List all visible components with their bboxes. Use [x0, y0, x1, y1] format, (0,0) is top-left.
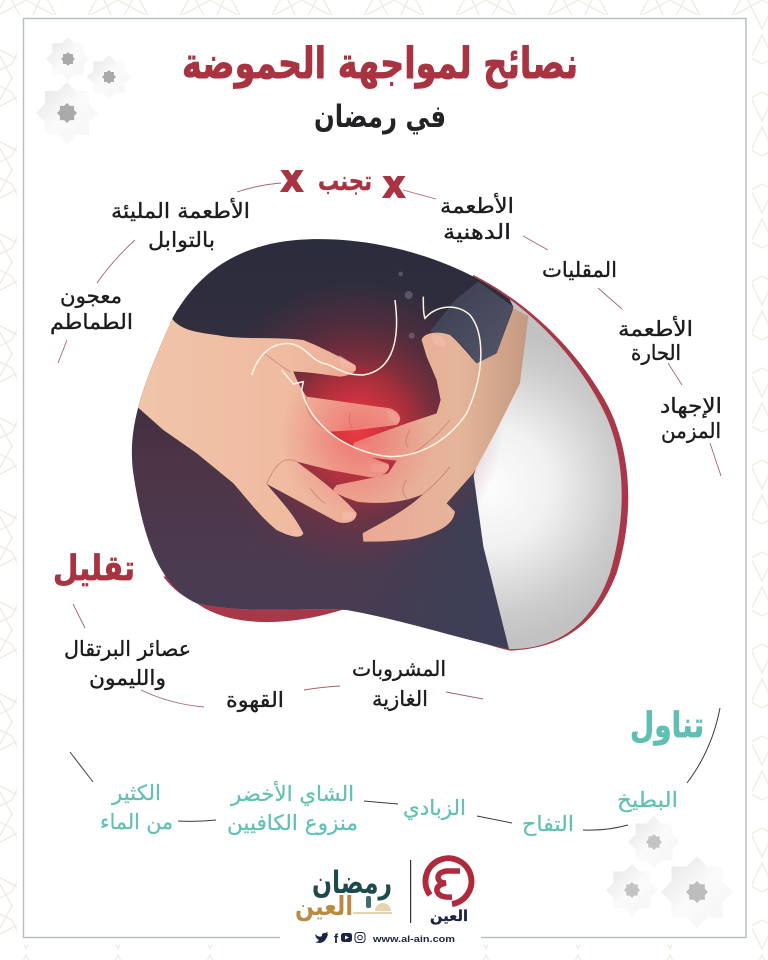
logo: Al Ain: [425, 858, 471, 925]
wordmark ramadan: رمضان: [312, 865, 392, 901]
reduce list: [64, 637, 446, 712]
icon: x left: X: [282, 166, 302, 196]
footer notch: [280, 930, 481, 960]
icon: youtube: [341, 933, 352, 942]
item: yoghurt: الزبادي: [403, 796, 466, 820]
logo wordmark: العين: [430, 907, 468, 925]
item: chronic stress: [660, 394, 722, 443]
item: water: [100, 781, 173, 834]
item: spicy food: بالتوابل: [148, 228, 215, 252]
right hand: [333, 308, 528, 542]
subtitle: في رمضان: [314, 99, 446, 135]
icon: instagram: [355, 932, 365, 942]
logo letter: [437, 871, 460, 897]
lantern and dome: [353, 896, 392, 913]
shirt: [123, 233, 513, 653]
connector arcs: [58, 183, 721, 830]
left hand: [133, 318, 400, 537]
title: نصائح لمواجهة الحموضة: [182, 39, 578, 89]
item: spicy food: [111, 198, 250, 252]
item: green tea: الشاي الأخضر: [230, 781, 354, 806]
heading: avoid: [282, 166, 404, 202]
shirt blue tint: [382, 474, 509, 649]
item: citrus juice: [64, 637, 191, 690]
acid bubbles: [398, 272, 415, 339]
item: water: الكثير: [111, 781, 161, 805]
item: chronic stress: الإجهاد: [660, 394, 722, 418]
item: apple: التفاح: [522, 812, 574, 836]
website: www.al-ain.com: [372, 934, 455, 945]
sleeve: [430, 282, 513, 363]
item: watermelon: البطيخ: [617, 788, 678, 812]
logo: Ramadan Al Ain: [295, 865, 392, 922]
item: spicy food: الأطعمة المليئة: [111, 198, 250, 223]
label avoid: تجنب: [318, 166, 372, 197]
photo blob: stomach pain: [123, 233, 633, 657]
eat list: [100, 781, 678, 836]
item: tomato paste: الطماطم: [50, 310, 133, 335]
item: chronic stress: المزمن: [661, 419, 721, 443]
finger creases: [263, 353, 450, 503]
item: fatty food: الدهنية: [443, 220, 511, 244]
stomach outline: [252, 297, 481, 457]
item: fatty food: الأطعمة: [440, 193, 514, 218]
wordmark al ain: العين: [295, 892, 353, 922]
decorative stars bottom right: [606, 816, 733, 928]
heading: reduce: تقليل: [53, 549, 135, 589]
grey background: [127, 233, 633, 657]
heading: eat: تناول: [630, 706, 704, 746]
photo clipped to blob: [123, 233, 633, 657]
shirt pain glow: [258, 293, 496, 556]
item: tomato paste: معجون: [60, 284, 122, 308]
item: citrus juice: والليمون: [89, 666, 166, 690]
item: hot food: الحارة: [631, 341, 681, 365]
item: hot food: الأطعمة: [618, 316, 693, 341]
icon: twitter: [315, 932, 328, 943]
item: soft drinks: الغازية: [372, 687, 428, 711]
red pain glow over hands: [292, 374, 420, 500]
item: hot food: [618, 316, 693, 365]
item: tomato paste: [50, 284, 133, 335]
item: green tea: منزوع الكافيين: [227, 811, 358, 835]
item: coffee: القهوة: [226, 688, 284, 712]
item: fatty food: [440, 193, 514, 244]
footer social links: [315, 931, 455, 946]
icon: facebook: f: [334, 931, 339, 946]
item: soft drinks: [352, 657, 446, 711]
logo divider: [410, 860, 411, 923]
icon: x right: X: [384, 172, 404, 202]
red crescent behind photo: [163, 275, 628, 651]
item: green tea: [227, 781, 358, 835]
decorative stars top left: [36, 37, 131, 144]
logo ring: [425, 858, 471, 904]
item: soft drinks: المشروبات: [352, 657, 446, 681]
avoid list: [50, 193, 722, 443]
item: water: من الماء: [100, 810, 173, 834]
fingernails: [293, 335, 446, 536]
item: citrus juice: عصائر البرتقال: [64, 637, 191, 661]
item: fried food: المقليات: [542, 258, 617, 282]
